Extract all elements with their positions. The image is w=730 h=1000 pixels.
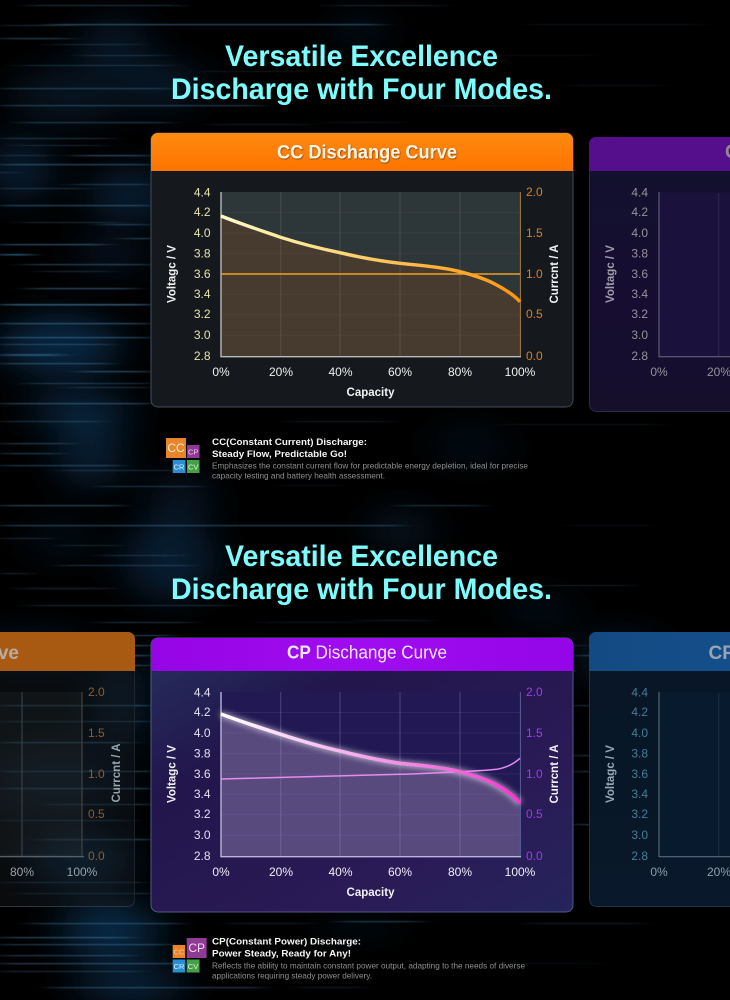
CC voltage ticks: 3.6 (194, 267, 211, 281)
text block: CC description: Emphasizes the constant current flow for predictable energy depletion, ideal for precise (212, 461, 528, 471)
side CR capacity ticks: 0% (650, 865, 668, 879)
CC voltage ticks: 3.2 (194, 307, 211, 321)
icon: CP mode selector: CR (174, 962, 185, 971)
side CR header (589, 632, 730, 671)
side CR voltage ticks: 3.2 (631, 807, 648, 821)
CP voltage ticks: 3.6 (194, 767, 211, 781)
side CR voltage ticks: 3.4 (631, 787, 648, 801)
panel: side CC preview (bottom left) (0, 632, 135, 906)
text block: CC description: CC(Constant Current) Discharge: (212, 437, 367, 448)
CC constant current line (221, 273, 520, 275)
CP voltage ticks: 4.0 (194, 726, 211, 740)
text block: CC description (212, 437, 528, 481)
CC voltage ticks: 4.2 (194, 205, 211, 219)
CC voltage ticks: 4.4 (194, 186, 211, 200)
CC header: CC Dischange Curve (277, 142, 457, 164)
text block: CP description: Reflects the ability to maintain constant power output, adapting to the needs of diverse (212, 961, 525, 971)
CP capacity ticks: 20% (269, 865, 293, 879)
side CC header (0, 632, 135, 671)
CC current ticks: 0.0 (526, 349, 543, 363)
CP chart (221, 692, 521, 857)
CC right axis (519, 192, 521, 356)
side CR voltage ticks: 4.2 (631, 705, 648, 719)
title 2: Discharge with Four Modes. (171, 573, 552, 606)
CC capacity ticks: 0% (212, 365, 230, 379)
CP capacity ticks: 80% (448, 865, 472, 879)
CC axes (221, 192, 521, 357)
CP current ticks: 2.0 (526, 685, 543, 699)
CP voltage ticks: 3.0 (194, 828, 211, 842)
CC voltage ticks: 4.0 (194, 226, 211, 240)
side CP capacity ticks: 0% (650, 365, 668, 379)
CC plot background (221, 192, 520, 356)
side CP voltage ticks: 4.0 (631, 226, 648, 240)
CP grid (221, 692, 520, 856)
CC x axis title: Capacity (347, 387, 395, 399)
CP voltage ticks: 4.4 (194, 686, 211, 700)
text block: CC description: Steady Flow, Predictable Go! (212, 449, 347, 460)
CC voltage axis title: Voltagc / V (166, 245, 178, 303)
CC voltage ticks: 3.4 (194, 287, 211, 301)
side CR voltage ticks: 4.4 (631, 686, 648, 700)
CP capacity ticks (212, 865, 536, 879)
CP voltage ticks: 3.2 (194, 807, 211, 821)
CP voltage axis title: Voltagc / V (166, 745, 178, 803)
side CP header (589, 137, 730, 171)
icon: CP mode selector: CV (188, 962, 198, 971)
panel: side CR preview (bottom right) (589, 632, 730, 906)
CP current ticks: 1.5 (526, 726, 543, 740)
side CR voltage ticks: 3.0 (631, 828, 648, 842)
CC voltage ticks: 3.8 (194, 246, 211, 260)
title 1: Discharge with Four Modes. (171, 73, 552, 106)
CC area under voltage curve (221, 216, 520, 356)
icon: CC mode selector: CP (188, 447, 198, 456)
side CP voltage ticks: 3.0 (631, 328, 648, 342)
CP capacity ticks: 100% (505, 865, 536, 879)
CC grid (221, 192, 520, 356)
icon: CC mode selector (166, 438, 200, 473)
CC current ticks (526, 185, 543, 363)
title 2: Versatile Excellence (225, 540, 498, 573)
side CP capacity ticks (650, 368, 730, 376)
icon: CC mode selector: CR (174, 462, 185, 471)
CP header: CP Dischange Curve (287, 642, 447, 662)
CP voltage ticks (194, 686, 211, 863)
CC current ticks: 1.0 (526, 267, 543, 281)
CC current ticks: 0.5 (526, 307, 543, 321)
CC current axis title: Currcnt / A (549, 244, 561, 304)
CP voltage ticks: 3.8 (194, 746, 211, 760)
icon: CC mode selector: CC (167, 441, 185, 455)
CP voltage ticks: 4.2 (194, 705, 211, 719)
side CP voltage axis title: Voltagc / V (605, 245, 617, 303)
side CP voltage ticks: 3.4 (631, 287, 648, 301)
side CR voltage axis title: Voltagc / V (605, 745, 617, 803)
CC capacity ticks (212, 365, 536, 379)
side CP voltage ticks: 3.8 (631, 246, 648, 260)
text block: CP description: CP(Constant Power) Discharge: (212, 937, 361, 948)
CP current ticks: 1.0 (526, 767, 543, 781)
CC capacity ticks: 80% (448, 365, 472, 379)
title 2 (171, 540, 552, 606)
title 1 (171, 40, 552, 106)
CC voltage ticks: 3.0 (194, 328, 211, 342)
side CR capacity ticks (650, 868, 730, 876)
side CC current axis title: Currcnt / A (111, 744, 123, 802)
side CC current ticks: 0.0 (88, 849, 105, 863)
CC capacity ticks: 20% (269, 365, 293, 379)
CC voltage curve (221, 216, 520, 302)
CP voltage curve glow (221, 714, 520, 803)
panel: CC discharge curve (151, 133, 573, 407)
side CP voltage ticks: 3.2 (631, 307, 648, 321)
CP header (151, 638, 573, 671)
CC voltage ticks: 2.8 (194, 349, 211, 363)
title 1: Versatile Excellence (225, 40, 498, 73)
text block: CP description: Power Steady, Ready for Any! (212, 949, 351, 960)
icon: CP mode selector: CP (188, 941, 205, 955)
side CP plot area (659, 192, 730, 357)
CC capacity ticks: 60% (388, 365, 412, 379)
CC chart (221, 192, 521, 357)
CP capacity ticks: 40% (328, 865, 353, 879)
side CR voltage ticks: 2.8 (631, 849, 648, 863)
side CC current ticks (88, 685, 105, 863)
CC voltage ticks (194, 186, 211, 363)
CP voltage ticks: 3.4 (194, 787, 211, 801)
side CC current ticks: 1.5 (88, 726, 105, 740)
CC capacity ticks: 40% (328, 365, 353, 379)
side CR voltage ticks: 3.8 (631, 746, 648, 760)
icon: CP mode selector: CC (174, 947, 185, 956)
CP area under voltage curve (221, 714, 520, 856)
side CC current ticks: 2.0 (88, 685, 105, 699)
CC header (151, 133, 573, 171)
CP axes (221, 692, 521, 857)
side CP voltage ticks: 4.4 (631, 186, 648, 200)
panel: side CP preview (top right) (589, 137, 730, 412)
side CR voltage ticks: 4.0 (631, 726, 648, 740)
text block: CC description: capacity testing and battery health assessment. (212, 471, 385, 481)
side CC capacity ticks: 100% (67, 865, 98, 879)
text block: CP description (212, 937, 525, 981)
side CC capacity ticks (10, 868, 97, 876)
text block: CP description: applications requiring steady power delivery. (212, 971, 372, 981)
side CR voltage ticks: 3.6 (631, 767, 648, 781)
CP voltage curve (221, 714, 520, 803)
CP constant power current line (221, 758, 520, 779)
CP current ticks (526, 685, 543, 863)
CP capacity ticks: 0% (212, 865, 230, 879)
side CC current ticks: 1.0 (88, 767, 105, 781)
side CC plot area (0, 692, 84, 857)
CP voltage ticks: 2.8 (194, 849, 211, 863)
CP plot background (221, 692, 520, 856)
CP current ticks: 0.0 (526, 849, 543, 863)
CC current ticks: 1.5 (526, 226, 543, 240)
CP current axis title: Currcnt / A (549, 744, 561, 804)
CP right axis (519, 692, 521, 856)
side CP voltage ticks: 3.6 (631, 267, 648, 281)
side CR plot area (659, 692, 730, 857)
side CP voltage ticks: 4.2 (631, 205, 648, 219)
side CC capacity ticks: 80% (10, 865, 34, 879)
side CR voltage ticks (631, 686, 648, 863)
side CP voltage ticks: 2.8 (631, 349, 648, 363)
CP x axis title: Capacity (347, 887, 395, 899)
panel: CP discharge curve (151, 638, 573, 912)
side CC current ticks: 0.5 (88, 807, 105, 821)
side CP voltage ticks (631, 186, 648, 363)
CC current ticks: 2.0 (526, 185, 543, 199)
icon: CP mode selector (173, 938, 207, 972)
CC capacity ticks: 100% (505, 365, 536, 379)
icon: CC mode selector: CV (188, 462, 198, 471)
CP capacity ticks: 60% (388, 865, 412, 879)
CP current ticks: 0.5 (526, 807, 543, 821)
